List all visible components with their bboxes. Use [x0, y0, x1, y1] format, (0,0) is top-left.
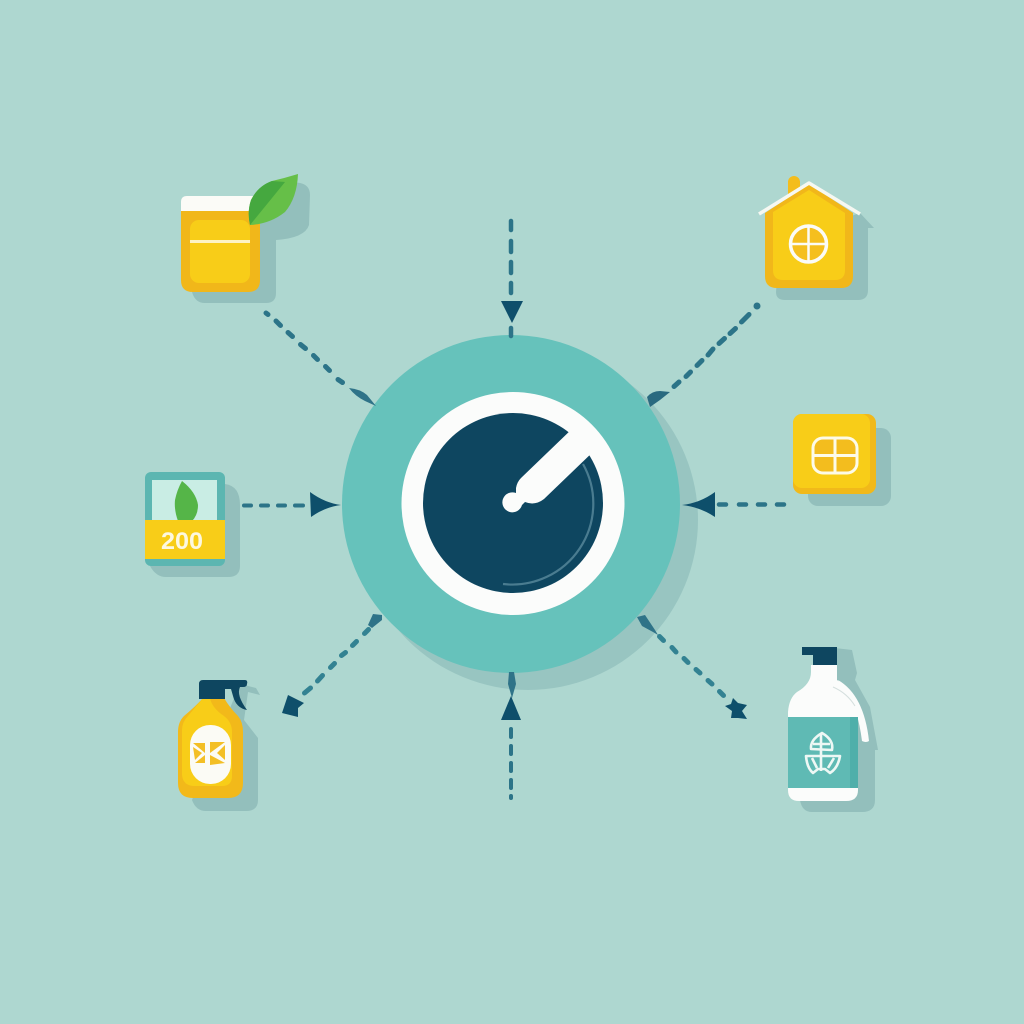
arrow: bottom — [501, 672, 521, 798]
chimney — [788, 176, 800, 202]
jar shadow — [192, 183, 310, 303]
hub shadow — [358, 350, 698, 690]
central hub gauge — [342, 335, 698, 690]
icon: house — [759, 176, 874, 300]
arrow: left — [244, 492, 341, 517]
bottle shadow — [800, 648, 878, 812]
jar label line — [190, 240, 250, 243]
spray label — [190, 725, 231, 784]
arrow: top-left — [266, 313, 376, 406]
house outer body — [765, 184, 853, 288]
leaf dark half — [249, 181, 285, 225]
spray label glyph — [193, 742, 225, 765]
arrow: bottom-right — [637, 615, 747, 719]
bottle neck — [811, 665, 837, 674]
bottle handle — [838, 680, 869, 742]
dial highlight arc — [503, 464, 593, 585]
tile inner — [793, 414, 870, 488]
tile grid glyph — [813, 438, 857, 473]
roof — [759, 183, 860, 214]
bottle body — [788, 672, 858, 801]
card leaf — [175, 481, 198, 521]
icon: jar with leaf — [181, 174, 310, 303]
icon: spray bottle — [178, 680, 260, 811]
bottle label side band — [850, 717, 858, 788]
icon: white pump bottle — [788, 647, 878, 812]
spray shadow — [192, 684, 260, 811]
house inner body — [773, 190, 845, 280]
spray body highlight — [182, 698, 232, 786]
arrow: right — [682, 492, 784, 517]
card shadow — [150, 484, 240, 577]
card yellow band — [145, 520, 225, 559]
card value: 200 — [161, 528, 203, 555]
icon: window tile — [793, 414, 891, 506]
spray head — [199, 680, 247, 710]
bottle handle crease — [833, 687, 855, 706]
arrow: bottom-left — [282, 614, 382, 717]
house window — [790, 226, 826, 262]
jar inner panel — [190, 220, 250, 283]
spray body — [178, 698, 243, 798]
arrow: top-right — [647, 302, 760, 407]
dial needle — [502, 427, 596, 512]
icon: 200 leaf card — [145, 472, 240, 577]
hub dark dial — [423, 413, 603, 593]
card frame — [145, 472, 225, 566]
bottle cap — [802, 647, 837, 665]
hub teal disc — [342, 335, 680, 673]
hub white ring — [402, 392, 624, 615]
jar body — [181, 209, 260, 292]
tile outer — [793, 414, 876, 494]
arrow: top — [501, 221, 523, 336]
bottle teal label — [788, 717, 858, 788]
tile shadow — [808, 428, 891, 506]
card window — [152, 480, 217, 522]
jar lid — [181, 196, 255, 211]
house shadow — [776, 213, 874, 300]
leaf — [249, 174, 298, 225]
bottle label glyph — [806, 733, 840, 773]
